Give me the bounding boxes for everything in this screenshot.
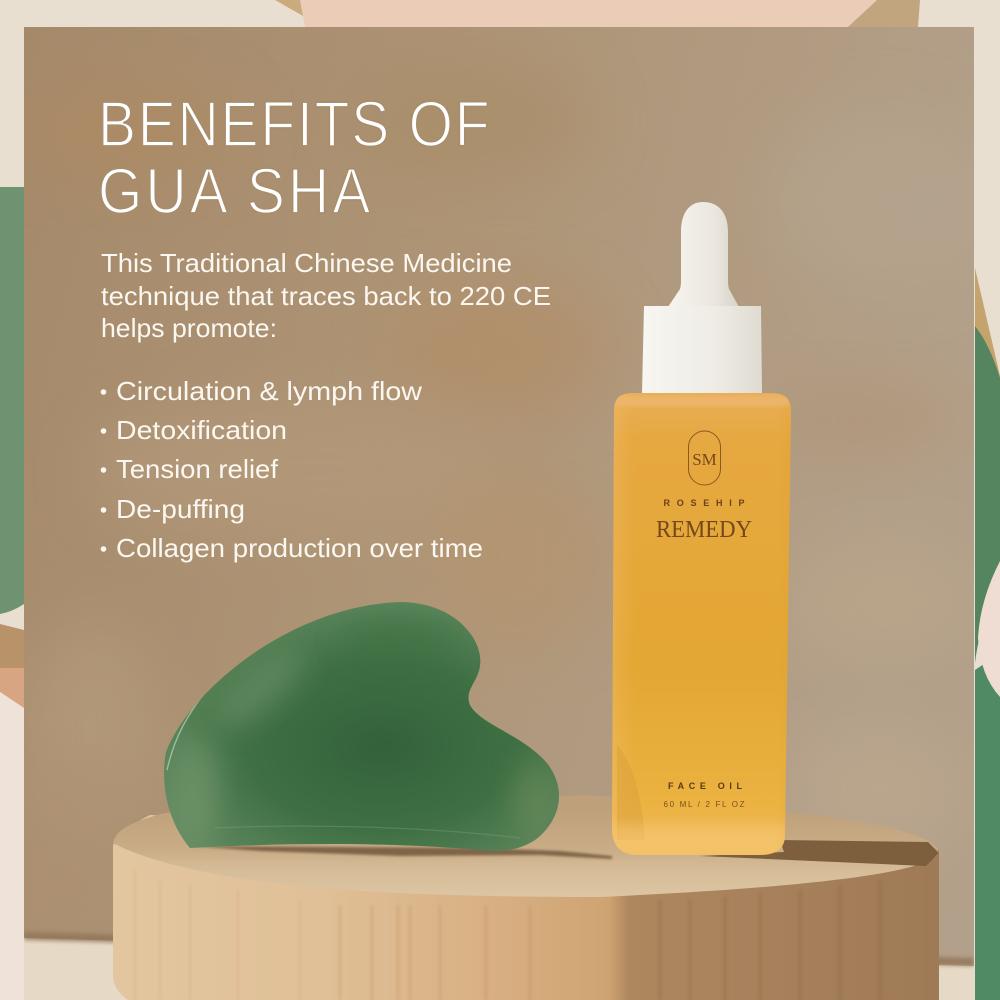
stone body — [164, 602, 559, 851]
intro text: helps promote: — [101, 313, 277, 343]
floor shadow line — [24, 932, 974, 966]
dropper bulb — [668, 202, 739, 307]
top tan wedge — [840, 0, 920, 27]
stone shading and highlights — [167, 615, 557, 845]
logo monogram — [688, 431, 720, 485]
label: Face oil: FACE OIL — [668, 781, 742, 791]
gua sha jade stone — [164, 602, 559, 851]
pedestal top surface — [113, 803, 939, 897]
item: detoxification: Detoxification — [116, 415, 287, 445]
title — [98, 88, 490, 227]
item: circulation: Circulation & lymph flow — [116, 376, 422, 406]
wood grain — [135, 870, 880, 1000]
label: Remedy: REMEDY — [656, 517, 752, 543]
right lower jade strip — [975, 660, 1000, 1000]
item: tension relief: Tension relief — [116, 454, 279, 484]
left jade stone strip — [0, 187, 24, 614]
benefits list — [101, 376, 483, 563]
right tan corner — [975, 268, 1000, 400]
pedestal side — [113, 815, 939, 1000]
left white quartz strip — [0, 692, 24, 1000]
gua sha cast shadow — [190, 846, 612, 859]
bottle reflection — [617, 746, 644, 831]
left peach quartz strip — [0, 668, 24, 708]
left tan stand strip — [0, 624, 24, 668]
wall mottling — [51, 91, 931, 896]
item: collagen: Collagen production over time — [116, 533, 483, 563]
label: volume: 60 ML / 2 FL OZ — [664, 800, 745, 809]
dropper collar — [642, 306, 762, 393]
bottle glass and oil — [608, 393, 796, 858]
right upper jade strip — [975, 326, 1000, 663]
label: Rosehip: ROSEHIP — [664, 498, 744, 508]
intro text: technique that traces back to 220 CE — [101, 281, 551, 311]
top left tan wedge — [275, 0, 305, 16]
title: GUA SHA — [98, 155, 371, 227]
logo monogram: SM — [692, 450, 717, 469]
intro text: This Traditional Chinese Medicine — [101, 248, 512, 278]
serum bottle — [608, 202, 796, 858]
item: de-puffing: De-puffing — [116, 494, 245, 524]
top rose quartz strip — [300, 0, 877, 27]
pedestal back ledge — [545, 796, 614, 815]
pedestal right cast shadow — [700, 840, 939, 866]
wooden pedestal — [113, 796, 939, 1000]
bottle top highlight — [612, 396, 790, 406]
title: BENEFITS OF — [98, 88, 490, 160]
right pink quartz stone — [978, 561, 1000, 697]
floor band — [24, 938, 974, 1000]
intro text — [101, 248, 551, 343]
bottle base glow — [610, 825, 788, 857]
